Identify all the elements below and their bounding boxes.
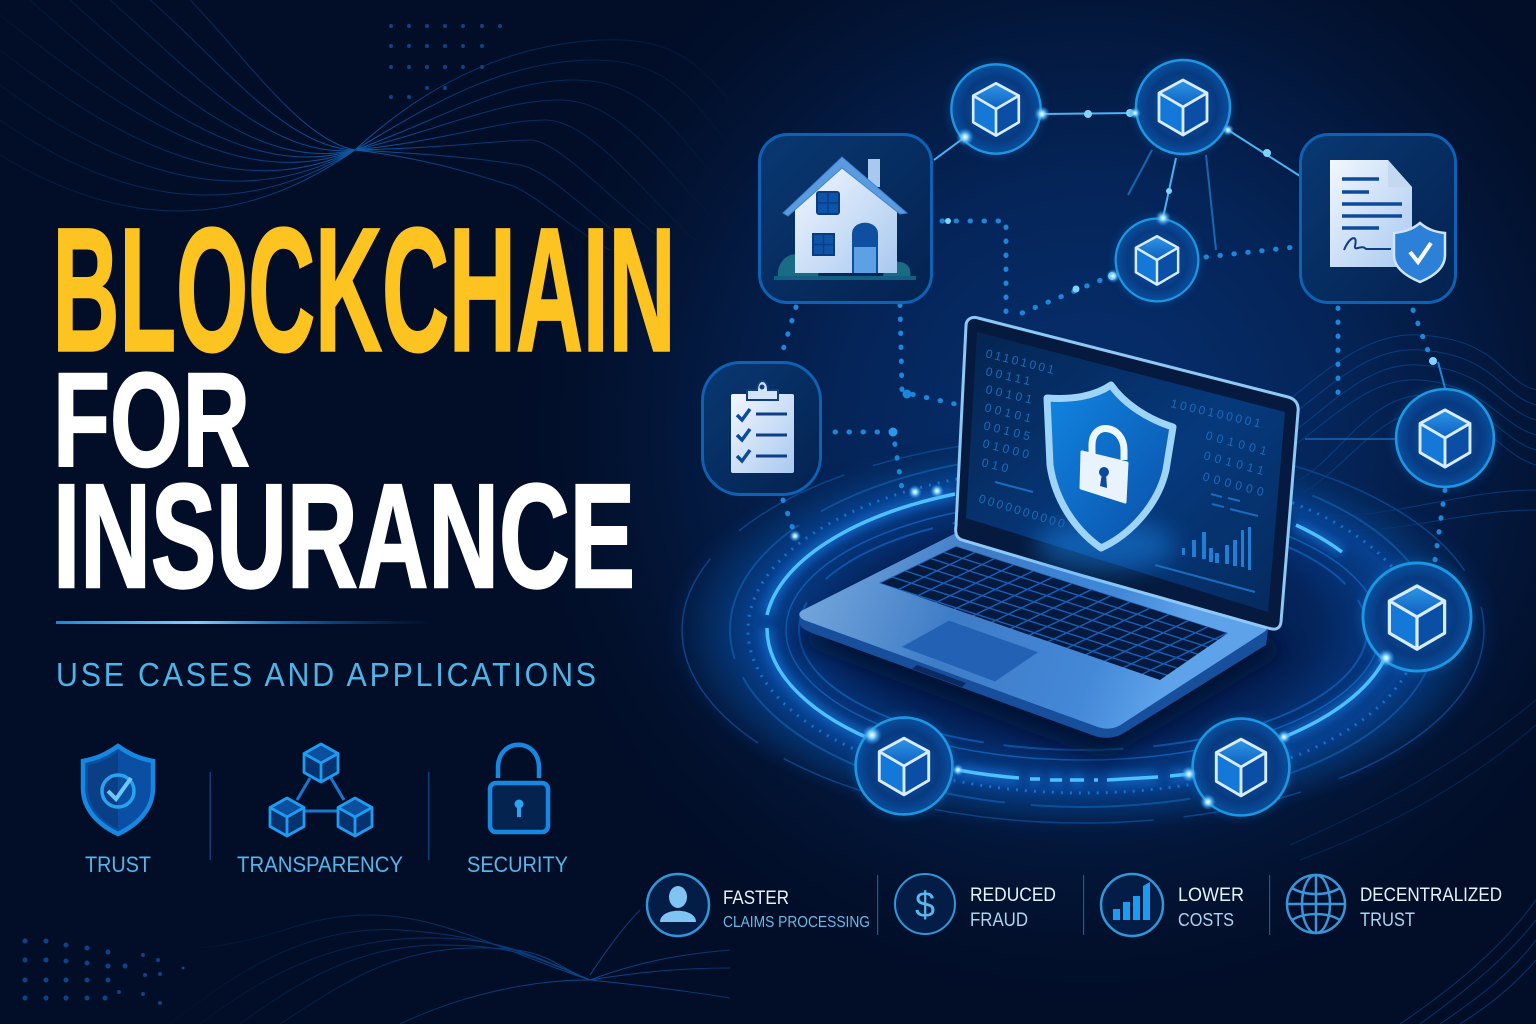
screen binary text: 000000 <box>1201 469 1270 500</box>
label: DECENTRALIZED <box>1360 884 1502 906</box>
cast shadow <box>790 560 1290 760</box>
panel: clipboard <box>702 362 820 494</box>
screen binary text: 1000100001 <box>1169 396 1265 431</box>
subtitle: USE CASES AND APPLICATIONS <box>56 656 596 693</box>
laptop base <box>799 531 1268 738</box>
keyboard <box>879 546 1228 680</box>
node 5 <box>1361 561 1473 673</box>
label: LOWER <box>1178 884 1244 906</box>
label: CLAIMS PROCESSING <box>723 914 870 931</box>
screen binary text: 00105 <box>982 418 1035 444</box>
screen data dashes <box>995 482 1258 592</box>
dot grid top <box>389 24 502 99</box>
screen binary text: 001001 <box>1204 428 1273 459</box>
bottom-left wave bundle <box>170 910 730 1024</box>
screen mini chart <box>1182 527 1251 570</box>
cube nodes <box>789 58 1496 817</box>
title line: for: FOR <box>53 346 250 495</box>
screen binary text: 00101 <box>984 382 1037 407</box>
light sparks <box>789 106 1395 810</box>
title underline <box>56 621 436 624</box>
front notch <box>912 665 966 687</box>
label: REDUCED <box>970 884 1056 906</box>
icon: transparency cubes <box>270 744 372 836</box>
icon: trust shield <box>83 746 153 834</box>
laptop screen <box>956 317 1298 629</box>
title line: insurance: INSURANCE <box>53 454 635 619</box>
dot grid bottom <box>22 938 184 1005</box>
panel: house <box>760 134 932 302</box>
label: COSTS <box>1178 910 1234 930</box>
icon: person <box>647 874 709 936</box>
link dots <box>888 109 1437 436</box>
title line: blockchain: BLOCKCHAIN <box>52 192 676 388</box>
icon: house <box>774 157 916 280</box>
icon: checklist <box>731 381 794 473</box>
icon: padlock <box>490 745 548 832</box>
screen binary text: 001011 <box>1202 448 1270 479</box>
dotted links <box>780 221 1445 560</box>
label: trust: TRUST <box>85 852 151 877</box>
screen binary text: 010 <box>980 455 1013 476</box>
floor rings <box>663 425 1503 835</box>
icon: globe <box>1287 875 1345 933</box>
screen binary text: 00111 <box>984 364 1035 389</box>
top-left wave bundle <box>0 0 760 250</box>
trackpad <box>901 620 1039 682</box>
node 2 <box>1134 58 1232 156</box>
screen binary text <box>977 346 1273 532</box>
right wave bundle <box>1200 335 1536 1024</box>
node 6 <box>1191 717 1291 817</box>
icon: dollar: $ <box>915 884 935 925</box>
network connectors <box>780 109 1445 560</box>
icon: bars <box>1101 874 1163 936</box>
label: TRUST <box>1360 910 1415 931</box>
laptop <box>790 317 1298 760</box>
benefits row <box>647 874 1502 936</box>
panel: document <box>1300 134 1456 302</box>
lock <box>1081 429 1127 502</box>
solid links <box>934 113 1445 439</box>
screen binary text: 01000 <box>981 436 1034 462</box>
benefit: lower costs <box>1101 874 1244 936</box>
label: FRAUD <box>970 910 1028 931</box>
label: transparency: TRANSPARENCY <box>237 852 403 877</box>
node 7 <box>854 716 954 816</box>
value icons row <box>83 744 568 877</box>
screen binary text: 0000000000 <box>977 491 1069 532</box>
screen shield <box>1047 385 1173 548</box>
label: FASTER <box>723 887 789 909</box>
node 1 <box>949 62 1043 156</box>
icon: signed document <box>1330 160 1445 282</box>
icon: dollar <box>895 874 955 934</box>
label: security: SECURITY <box>467 852 568 877</box>
benefit: decentralized trust <box>1287 875 1502 933</box>
screen binary text: 00101 <box>983 400 1036 426</box>
benefit: faster claims <box>647 874 870 936</box>
node 4 <box>1394 387 1496 489</box>
benefit: reduced fraud <box>895 874 1056 934</box>
screen binary text: 01101001 <box>984 346 1058 377</box>
title <box>52 192 676 619</box>
node 3 <box>1114 217 1200 303</box>
